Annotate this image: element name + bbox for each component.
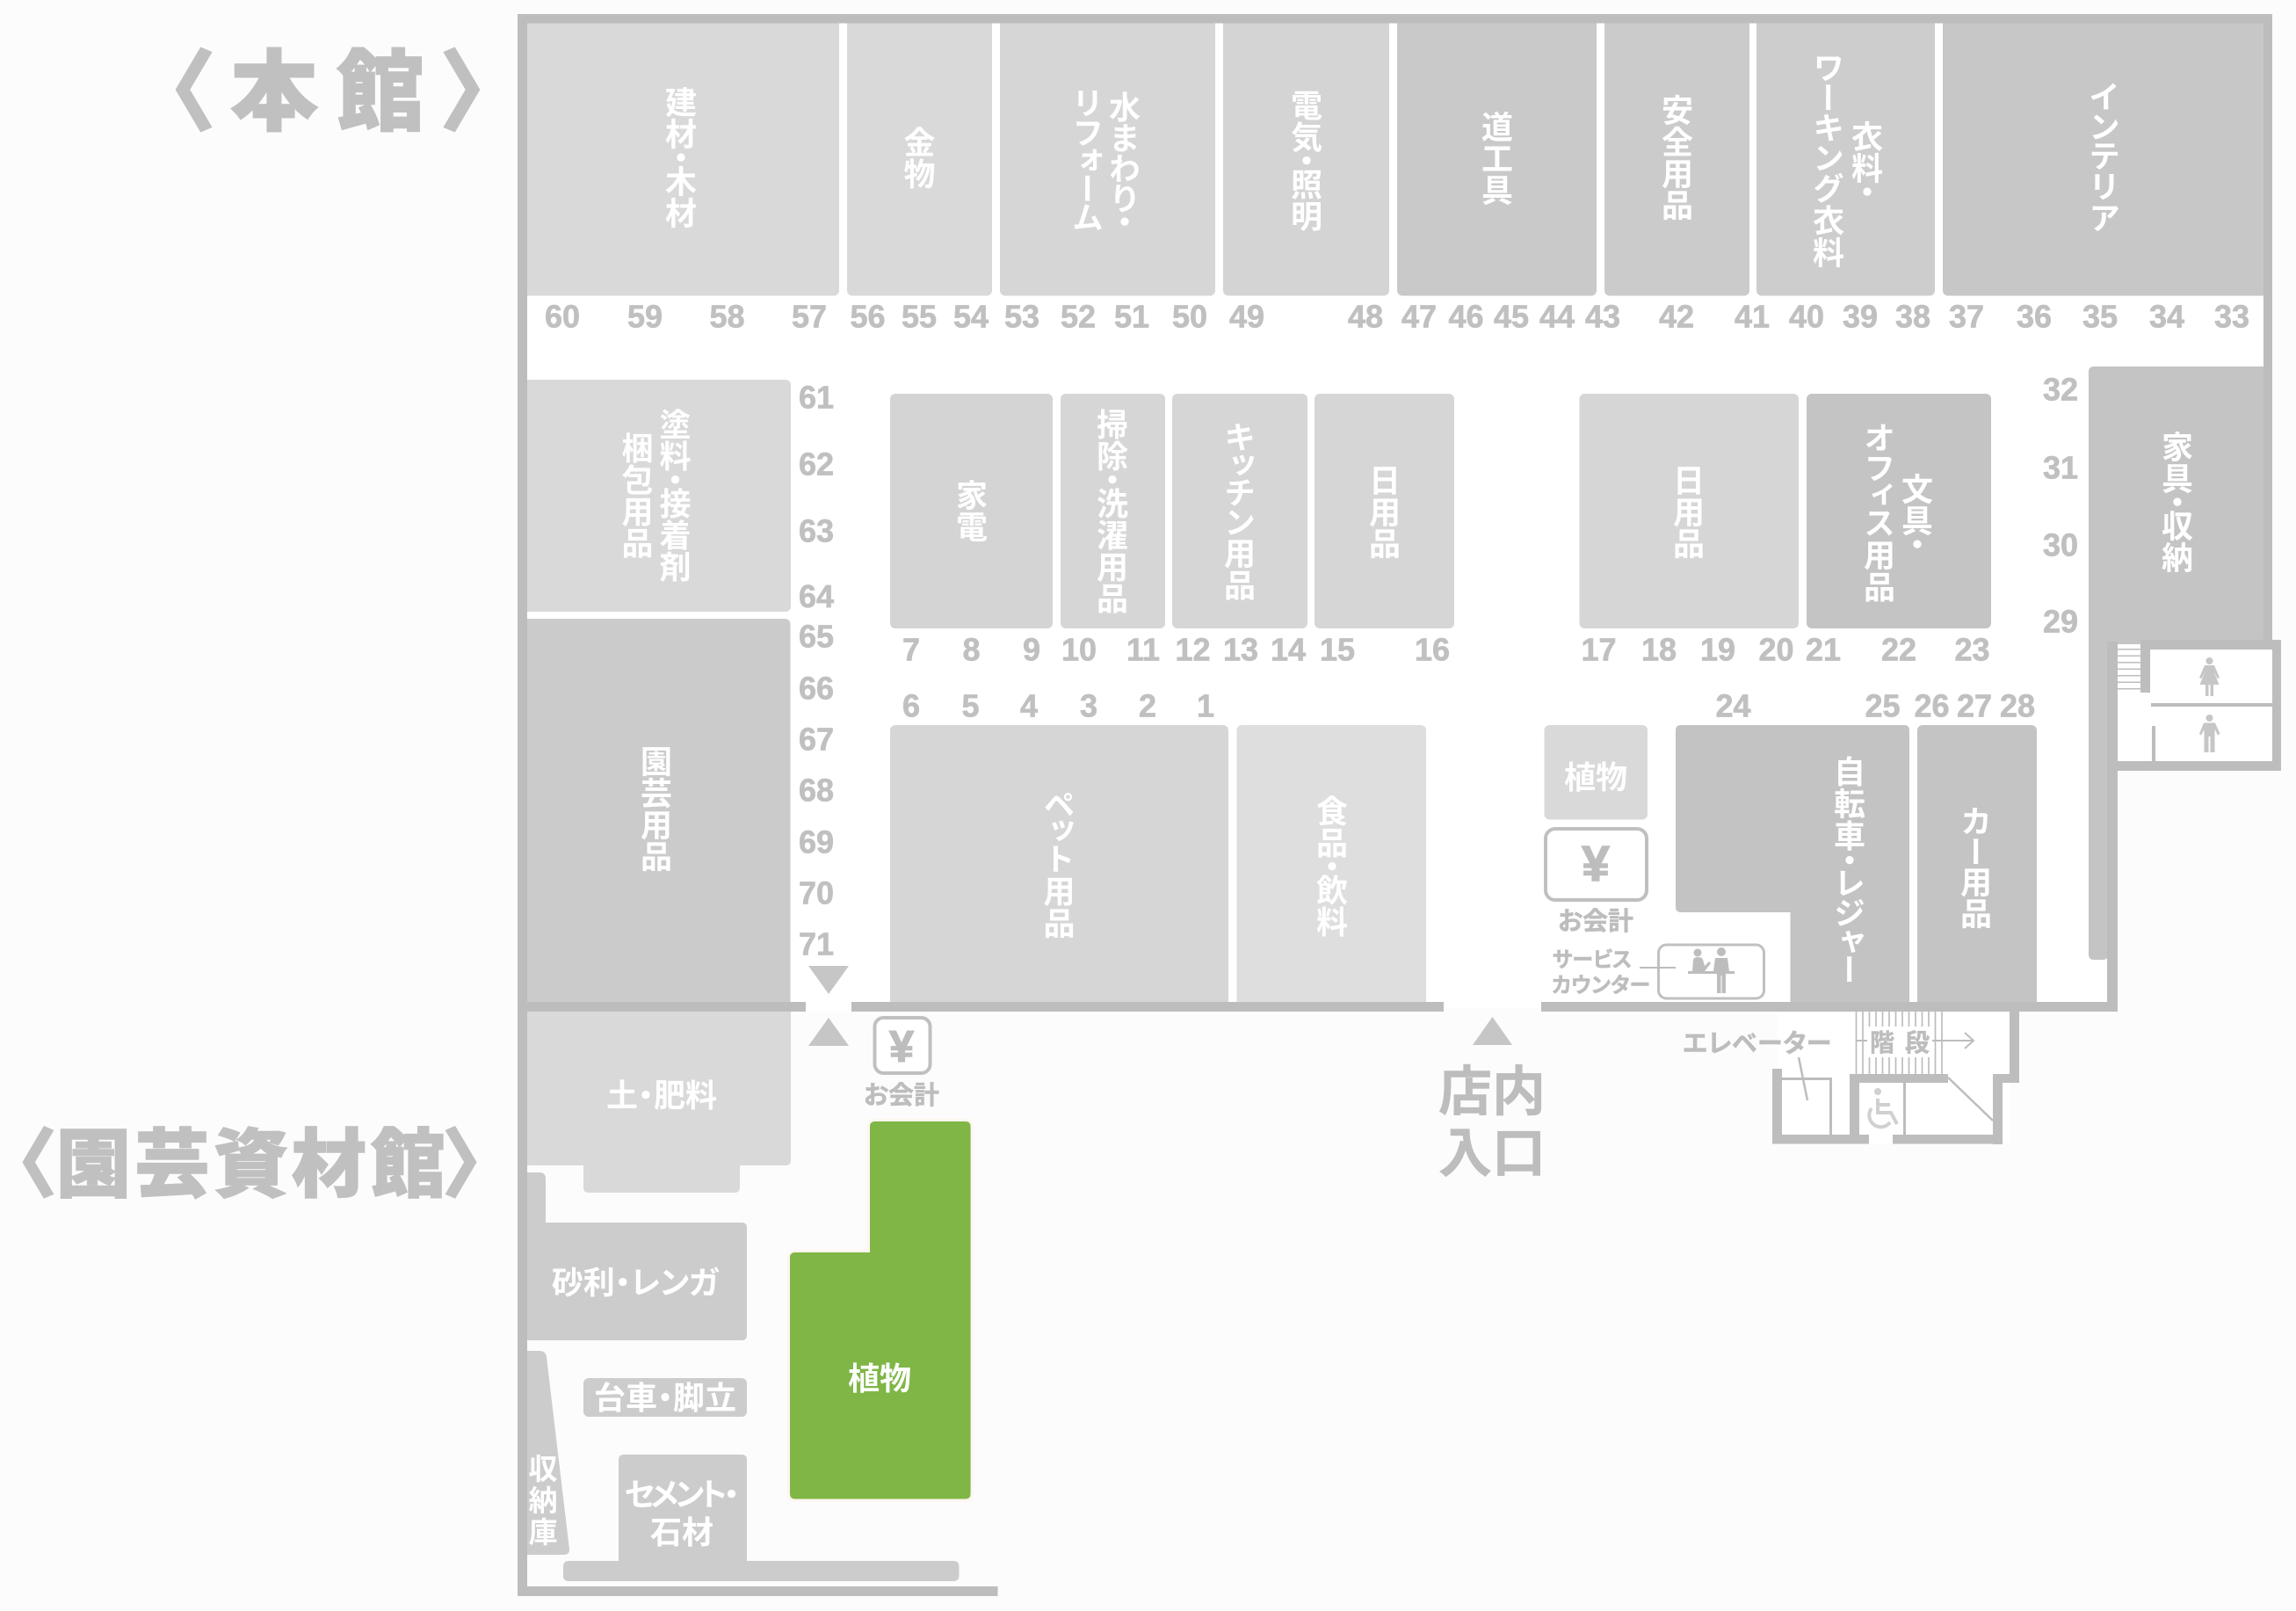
numbers: right column: 29: [2043, 603, 2078, 640]
numbers: aisle 7 to 16: 16: [1415, 631, 1450, 668]
panel: appliances: 家電: [949, 479, 995, 542]
label: service counter: [1552, 942, 1676, 998]
numbers: aisle 17 to 23: 21: [1806, 631, 1841, 668]
numbers: aisle 1 to 6: 6: [902, 687, 920, 724]
numbers: aisle 24 to 28: [1715, 687, 2035, 724]
arrow: between buildings up: [808, 1018, 849, 1046]
panel: stationery and office: オフィス用品: [1857, 422, 1902, 603]
panel: bicycle and leisure: 自転車・レジャー: [1827, 755, 1872, 984]
panel: paint, adhesive and packing: 梱包用品: [615, 432, 661, 559]
icon: checkout indoor: [1546, 829, 1647, 900]
numbers: right column: [2043, 371, 2078, 640]
numbers: left column: 69: [799, 824, 834, 860]
panel: safety goods: 安全用品: [1655, 94, 1700, 221]
numbers: aisle 1 to 6: 3: [1080, 687, 1097, 724]
label: service counter: サービス: [1553, 942, 1632, 973]
panel: furniture and storage: 家具・収納: [2155, 431, 2200, 573]
panel: appliances: [890, 394, 1053, 628]
panel: tools: [1397, 14, 1597, 295]
numbers: right column: 30: [2043, 527, 2078, 562]
numbers: top row: 37: [1949, 299, 1984, 334]
restrooms: [2107, 640, 2281, 771]
numbers: aisle 17 to 23: [1581, 631, 1990, 668]
panel: electrical and lighting: [1223, 14, 1389, 295]
panel: paint, adhesive and packing: [518, 380, 791, 612]
numbers: top row: 42: [1659, 299, 1694, 334]
numbers: top row: 44: [1539, 299, 1575, 334]
label: stairs: 段: [1905, 1024, 1930, 1059]
numbers: aisle 1 to 6: 1: [1197, 687, 1214, 724]
panel: plants indoor: 植物: [1564, 752, 1627, 798]
panel: pet goods: [890, 725, 1228, 1011]
panel: plumbing and reform: リフォーム: [1065, 88, 1111, 233]
label: stairs: 階: [1870, 1024, 1894, 1059]
panel: stationery and office: [1807, 394, 1991, 628]
numbers: top row: 33: [2214, 299, 2249, 334]
panel: electrical and lighting: 電気・照明: [1284, 90, 1329, 232]
numbers: aisle 7 to 16: 15: [1320, 631, 1355, 668]
heading: honkan: 〈本館〉: [128, 21, 527, 149]
numbers: aisle 1 to 6: 4: [1020, 687, 1038, 724]
numbers: top row: 48: [1348, 299, 1383, 334]
numbers: top row: 59: [627, 299, 663, 334]
numbers: top row: 55: [902, 299, 937, 334]
panel: cement and stone: [563, 1455, 960, 1581]
panel: plants highlighted: [790, 1121, 971, 1499]
numbers: aisle 24 to 28: 24: [1715, 687, 1751, 724]
label: store entrance: [1438, 1048, 1546, 1187]
label: checkout indoor: お会計: [1558, 901, 1633, 938]
restroom floor: [2118, 644, 2272, 761]
panel: gardening goods: 園芸用品: [634, 745, 679, 872]
numbers: top row: 45: [1494, 299, 1529, 334]
numbers: top row: 58: [709, 299, 745, 334]
numbers: left column: 62: [799, 446, 834, 482]
panel: soil and fertilizer: [518, 1003, 791, 1193]
numbers: top row: 35: [2082, 299, 2118, 334]
panel: hardware: [847, 14, 992, 295]
numbers: top row: 56: [850, 299, 886, 334]
label: store entrance: 入口: [1438, 1109, 1546, 1187]
numbers: left column: 68: [799, 772, 834, 809]
panel: plumbing and reform: [1000, 14, 1215, 295]
arrow: entrance: [1473, 1017, 1512, 1045]
numbers: left column: 66: [799, 670, 834, 707]
numbers: aisle 1 to 6: 2: [1139, 687, 1156, 724]
panel: storage: [518, 1351, 569, 1555]
numbers: top row: 49: [1229, 299, 1264, 334]
panel: gravel and bricks: [518, 1172, 747, 1340]
panel: kitchen goods: キッチン用品: [1217, 422, 1263, 601]
numbers: aisle 24 to 28: 28: [2000, 687, 2035, 724]
panel: furniture and storage: [2089, 366, 2267, 960]
label: checkout outdoor: お会計: [864, 1075, 939, 1112]
panel: storage: 収納庫: [522, 1454, 564, 1549]
numbers: top row: 52: [1061, 299, 1096, 334]
arrow: between buildings down: [808, 966, 849, 994]
numbers: aisle 7 to 16: 14: [1271, 631, 1306, 668]
panel: cleaning and laundry: 掃除・洗濯用品: [1090, 408, 1135, 613]
panel: carts and stepladders: 台車・脚立: [594, 1373, 736, 1419]
numbers: right column: 31: [2043, 450, 2078, 485]
panel: food and drink: 食品・飲料: [1309, 795, 1355, 937]
numbers: aisle 7 to 16: 7: [902, 631, 920, 668]
numbers: left column: 67: [799, 721, 834, 758]
panel: plants indoor: [1545, 725, 1648, 819]
panel: cement and stone: 石材: [650, 1507, 713, 1553]
stair hall floor: [1778, 1012, 2010, 1143]
numbers: top row: 51: [1114, 299, 1149, 334]
label: elevator: エレベーター: [1683, 1023, 1832, 1060]
panel: safety goods: [1604, 14, 1749, 295]
numbers: left column: [799, 380, 834, 962]
numbers: left column: 64: [799, 578, 834, 614]
numbers: aisle 1 to 6: 5: [961, 687, 980, 724]
numbers: top row: 54: [953, 299, 989, 334]
numbers: aisle 7 to 16: 13: [1223, 631, 1258, 668]
panel: building materials: 建材・木材: [658, 86, 704, 229]
panel: plumbing and reform: 水まわり・: [1102, 91, 1148, 229]
numbers: aisle 17 to 23: 18: [1641, 631, 1677, 668]
numbers: top row: 39: [1843, 299, 1878, 334]
numbers: aisle 7 to 16: [902, 631, 1450, 668]
numbers: top row: 60: [545, 299, 580, 334]
numbers: left column: 71: [799, 926, 834, 962]
numbers: aisle 24 to 28: 25: [1865, 687, 1901, 724]
icon: checkout outdoor: [875, 1018, 930, 1073]
numbers: top row: 57: [792, 299, 827, 334]
numbers: aisle 7 to 16: 8: [962, 631, 981, 668]
panel: clothing and work clothing: 衣料・: [1844, 120, 1890, 200]
panel: clothing and work clothing: [1756, 14, 1935, 295]
arrow: stairs: [1857, 1033, 1974, 1049]
panel: pet goods: ペット用品: [1037, 791, 1083, 940]
stair treads: [1856, 1012, 1942, 1074]
panel: stationery and office: 文具・: [1894, 473, 1940, 552]
panel: cleaning and laundry: [1061, 394, 1165, 628]
numbers: aisle 17 to 23: 20: [1758, 631, 1794, 668]
stair hall and elevator: [1683, 1012, 2019, 1144]
numbers: top row: [545, 299, 2249, 334]
numbers: top row: 34: [2149, 299, 2184, 334]
panel: car goods: カー用品: [1953, 806, 1999, 929]
numbers: left column: 70: [799, 875, 834, 911]
panel: interior: インテリア: [2082, 82, 2127, 232]
leader line: elevator: [1799, 1057, 1807, 1100]
numbers: left column: 65: [799, 619, 834, 654]
numbers: top row: 43: [1585, 299, 1620, 334]
numbers: aisle 7 to 16: 12: [1175, 631, 1211, 668]
panel: clothing and work clothing: ワーキング衣料: [1806, 53, 1851, 268]
panel: daily goods left: 日用品: [1362, 464, 1408, 559]
icon: checkout indoor: ¥: [1582, 836, 1610, 892]
panel: building materials: [518, 14, 839, 295]
numbers: top row: 53: [1004, 299, 1039, 334]
numbers: top row: 36: [2017, 299, 2052, 334]
panel: gravel and bricks: 砂利・レンガ: [552, 1258, 719, 1303]
numbers: aisle 7 to 16: 9: [1023, 631, 1040, 668]
panel: daily goods left: [1315, 394, 1454, 628]
numbers: aisle 24 to 28: 26: [1914, 687, 1950, 724]
main building white floor: [527, 23, 2263, 1012]
panel: soil and fertilizer: 土・肥料: [606, 1070, 717, 1116]
numbers: top row: 46: [1448, 299, 1484, 334]
panel: gardening goods: [518, 619, 791, 1011]
walls: [518, 14, 2272, 1596]
panel: daily goods right: [1580, 394, 1799, 628]
panel: bicycle and leisure: [1676, 725, 1909, 1011]
numbers: top row: 40: [1789, 299, 1824, 334]
numbers: aisle 24 to 28: 27: [1957, 687, 1992, 724]
numbers: left column: 61: [799, 380, 834, 415]
panel: tools: 道工具: [1474, 111, 1520, 206]
panel: car goods: [1917, 725, 2037, 1011]
icon: checkout outdoor: ¥: [889, 1022, 914, 1071]
numbers: top row: 50: [1172, 299, 1207, 334]
numbers: top row: 41: [1735, 299, 1770, 334]
panel: cement and stone: セメント・: [625, 1469, 735, 1515]
panel: daily goods right: 日用品: [1666, 464, 1712, 559]
numbers: left column: 63: [799, 513, 834, 548]
numbers: aisle 17 to 23: 23: [1954, 631, 1990, 668]
panel: interior: [1943, 14, 2272, 295]
label: service counter: カウンター: [1552, 968, 1650, 998]
numbers: aisle 17 to 23: 17: [1581, 631, 1617, 668]
numbers: top row: 47: [1402, 299, 1437, 334]
panel: hardware: 金物: [896, 126, 942, 190]
label: store entrance: 店内: [1438, 1048, 1546, 1126]
numbers: aisle 1 to 6: [902, 687, 1214, 724]
panel: food and drink: [1237, 725, 1426, 1011]
numbers: right column: 32: [2043, 371, 2078, 408]
icon: women: [2199, 657, 2220, 696]
panel: plants highlighted: 植物: [848, 1353, 911, 1399]
panel: paint, adhesive and packing: 塗料・接着剤: [652, 408, 698, 582]
icon: service counter: [1640, 945, 1764, 998]
numbers: aisle 7 to 16: 10: [1061, 631, 1097, 668]
numbers: top row: 38: [1895, 299, 1930, 334]
icon: men: [2199, 715, 2220, 752]
icon: wheelchair: [1869, 1088, 1897, 1127]
panel: kitchen goods: [1172, 394, 1307, 628]
numbers: aisle 17 to 23: 19: [1700, 631, 1735, 668]
numbers: aisle 7 to 16: 11: [1126, 631, 1160, 668]
numbers: aisle 17 to 23: 22: [1881, 631, 1916, 668]
